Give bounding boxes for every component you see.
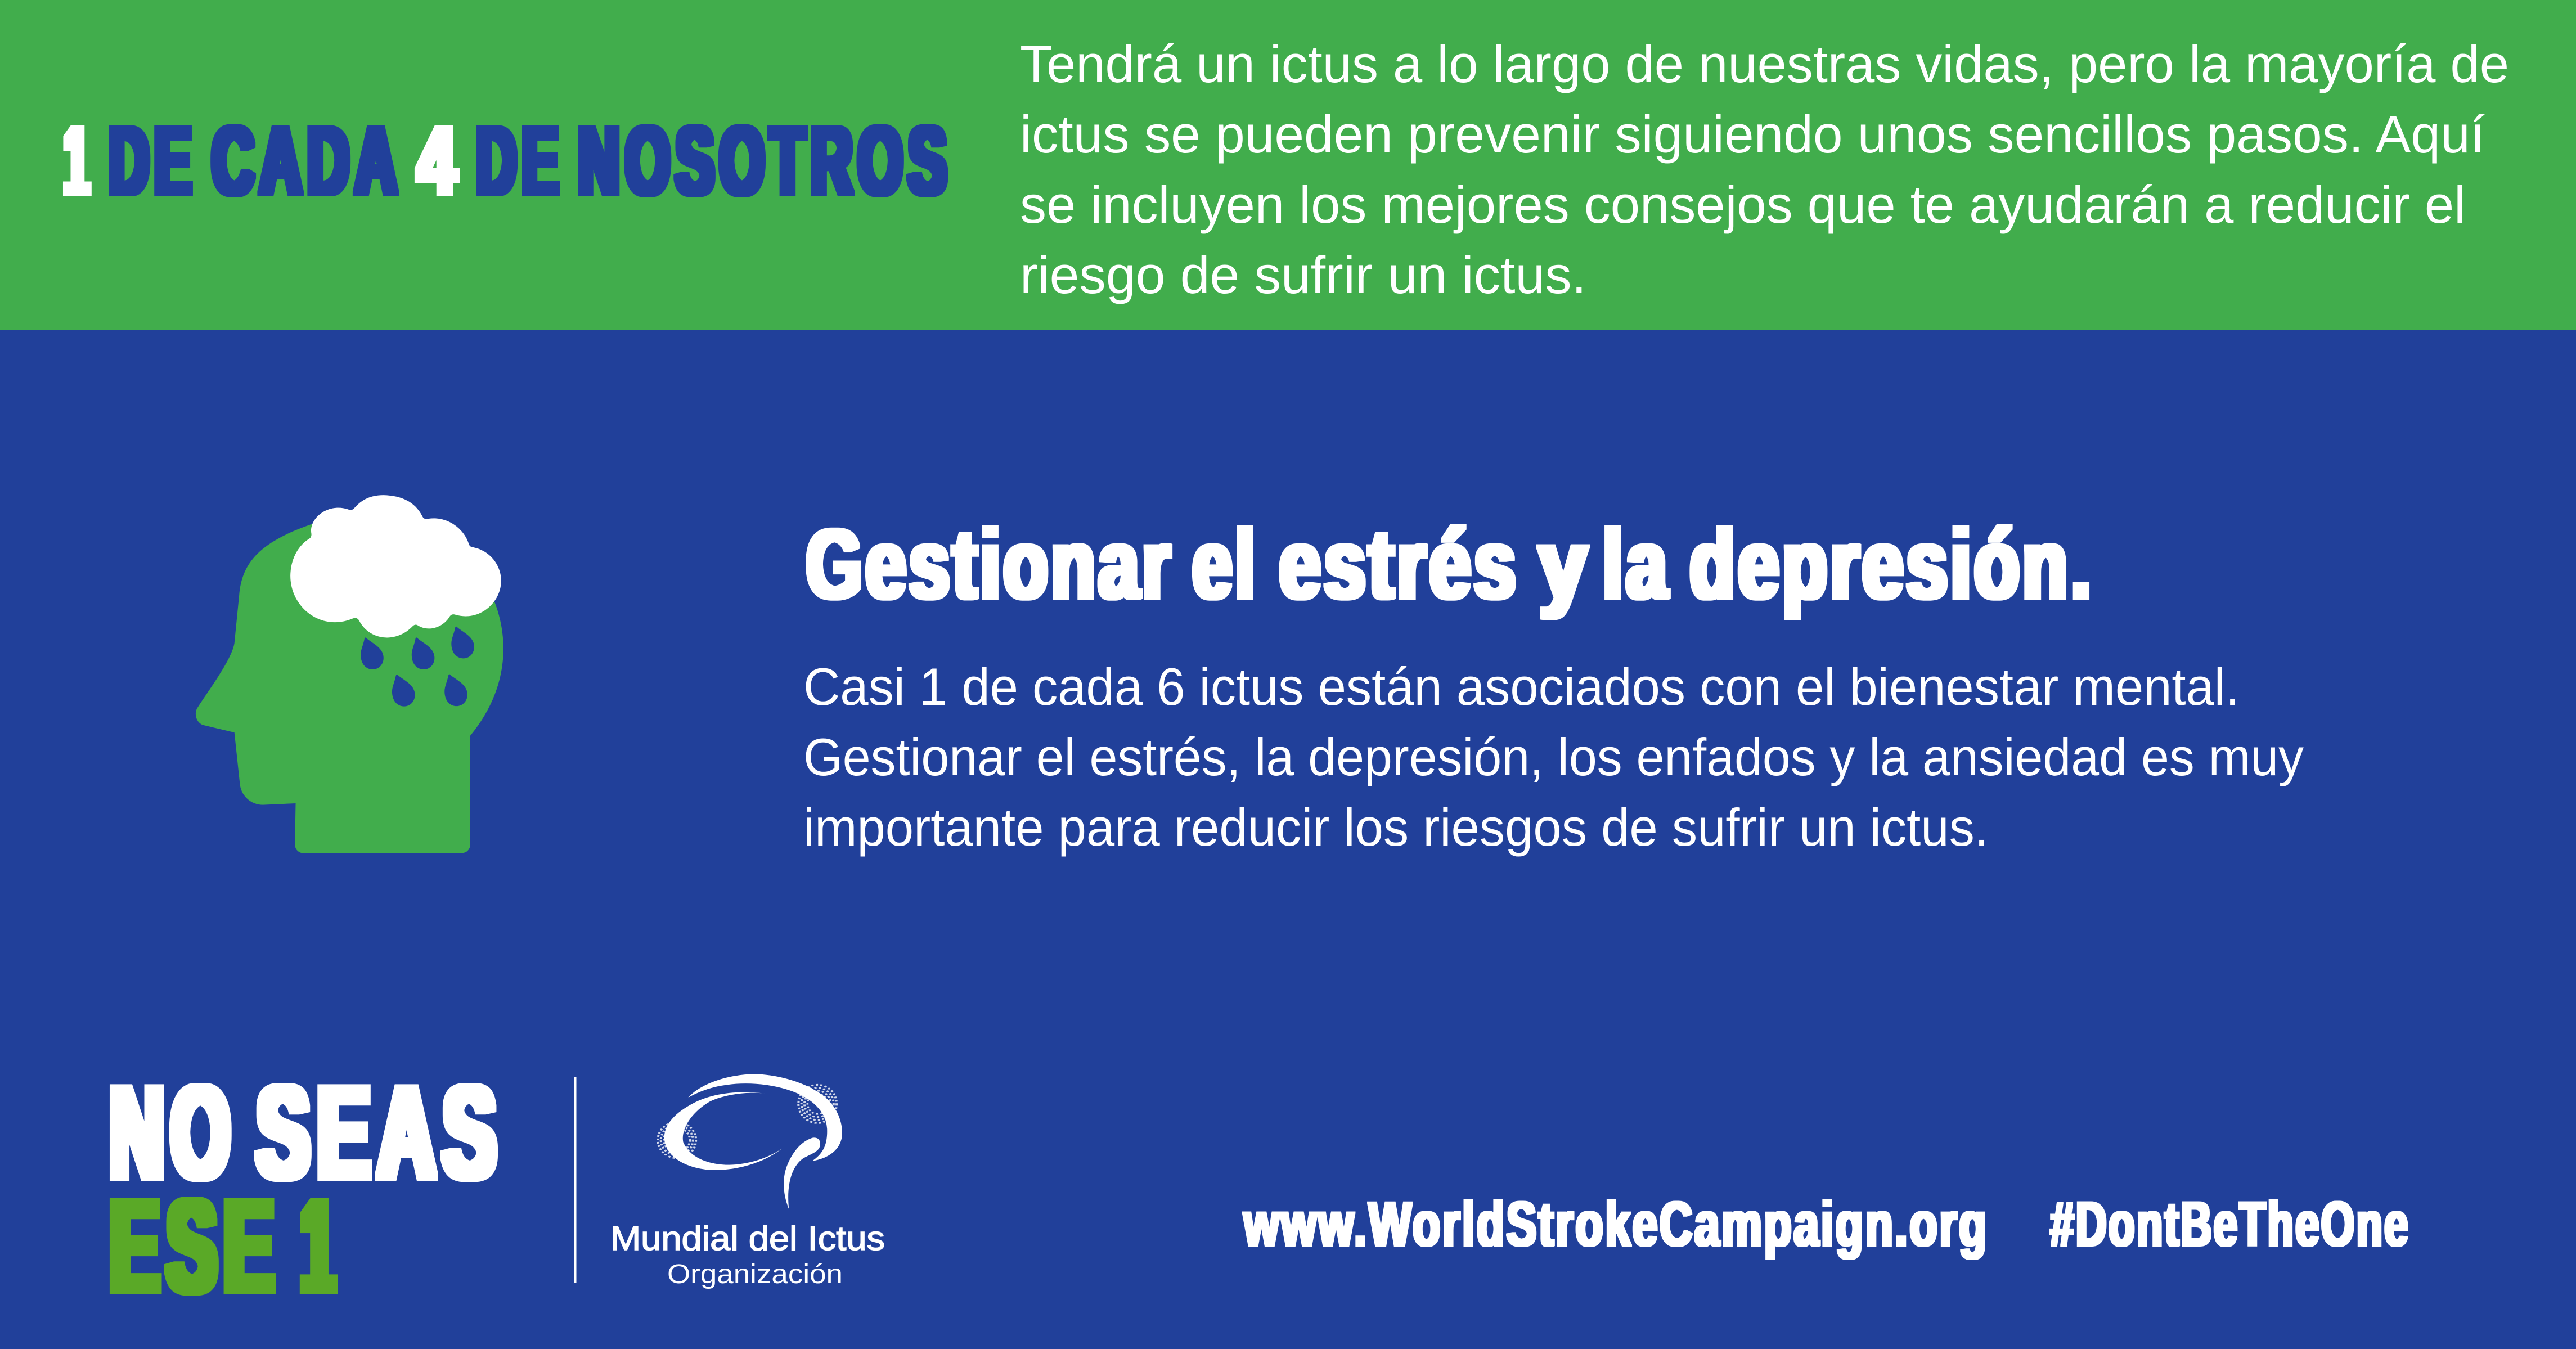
text block: intro paragraph: ictus se pueden prevenir siguiendo unos sencillos pasos. Aquí [1020, 105, 2485, 164]
campaign logo: no seas ese 1: SEAS [257, 1060, 503, 1206]
heading: 1 de cada 4 de nosotros: CADA [212, 107, 403, 215]
heading: 1 de cada 4 de nosotros: DE [476, 107, 564, 215]
heading: topic title: estrés [1279, 510, 1519, 619]
organisation logo: world stroke organization [610, 1074, 885, 1289]
heading: topic title: depresión. [1690, 510, 2094, 619]
heading: 1 de cada 4 de nosotros [64, 107, 952, 215]
text block: intro paragraph: Tendrá un ictus a lo largo de nuestras vidas, pero la mayoría de [1020, 34, 2509, 93]
panel: top banner [0, 0, 2576, 330]
text block: body paragraph: importante para reducir los riesgos de sufrir un ictus. [803, 798, 1989, 857]
heading: 1 de cada 4 de nosotros: NOSOTROS [578, 107, 952, 215]
text: mundial del ictus: Mundial del Ictus [610, 1220, 885, 1257]
heading: topic title [806, 510, 2094, 619]
text block: body paragraph: Gestionar el estrés, la depresión, los enfados y la ansiedad es muy [803, 727, 2304, 786]
text block: intro paragraph: riesgo de sufrir un ictus. [1020, 245, 1586, 304]
icon: head with rain cloud [196, 495, 503, 853]
campaign logo: no seas ese 1: NO [110, 1060, 237, 1206]
text block: body paragraph [803, 657, 2304, 857]
heading: topic title: la [1603, 510, 1670, 619]
text block: intro paragraph [1020, 34, 2509, 304]
campaign logo: no seas ese 1 [110, 1060, 503, 1319]
campaign logo: no seas ese 1: ESE [110, 1173, 281, 1319]
campaign logo: no seas ese 1: 1 [301, 1173, 335, 1319]
heading: 1 de cada 4 de nosotros: DE [109, 107, 197, 215]
text block: body paragraph: Casi 1 de cada 6 ictus están asociados con el bienestar mental. [803, 657, 2240, 716]
text block: intro paragraph: se incluyen los mejores consejos que te ayudarán a reducir el [1020, 175, 2466, 234]
heading: 1 de cada 4 de nosotros: 1 [64, 107, 89, 215]
heading: 1 de cada 4 de nosotros: 4 [417, 107, 456, 215]
icon: brain swoosh [658, 1074, 842, 1209]
link: campaign website: www.WorldStrokeCampaign.org [1243, 1189, 1989, 1259]
hashtag: #DontBeTheOne [2050, 1189, 2410, 1259]
heading: topic title: el [1193, 510, 1258, 619]
text: organización: Organización [667, 1260, 843, 1289]
heading: topic title: Gestionar [806, 510, 1174, 619]
heading: topic title: y [1539, 510, 1587, 619]
